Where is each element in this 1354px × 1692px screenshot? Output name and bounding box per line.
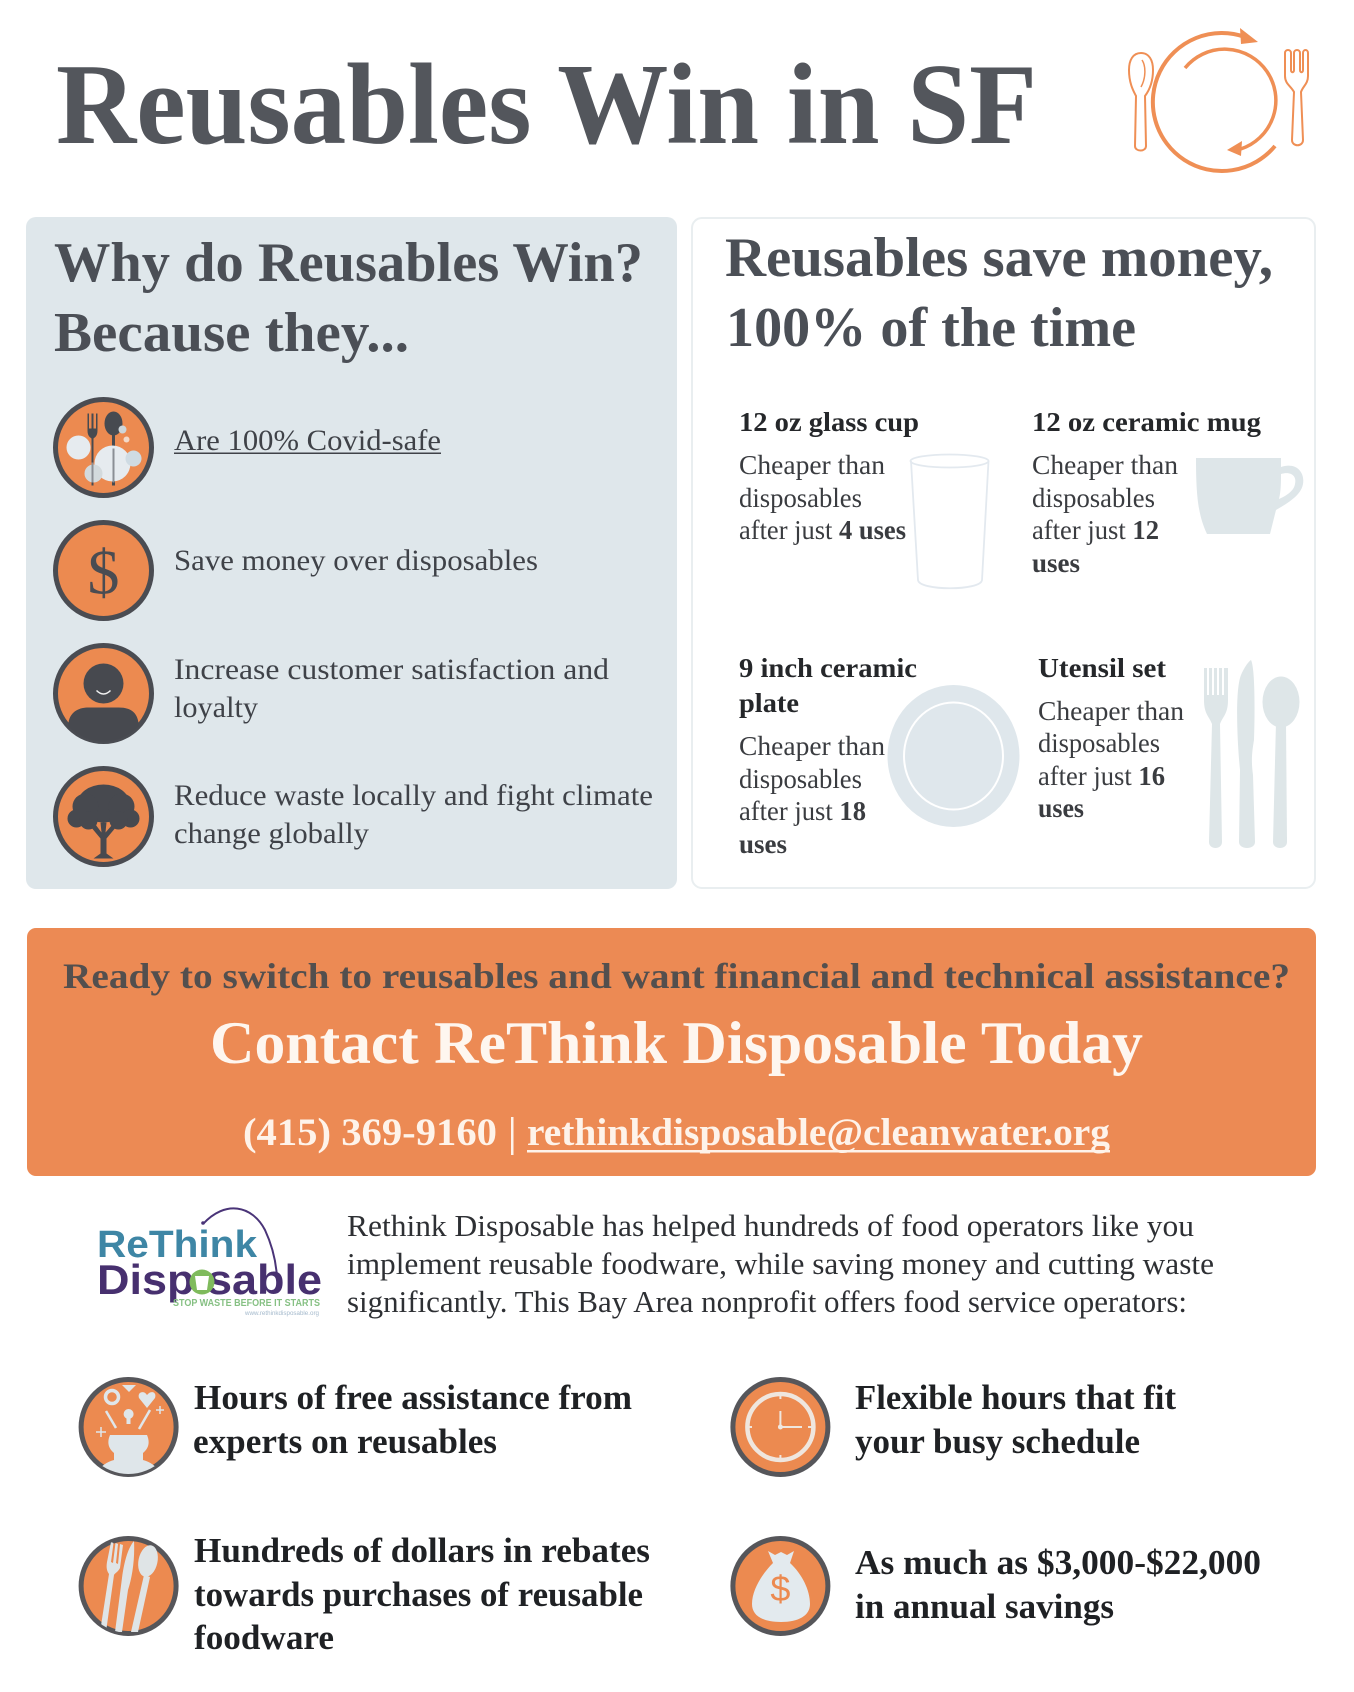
- item: utensil set: disposables: [1038, 728, 1160, 758]
- text: customer satisfaction: loyalty: [174, 691, 258, 724]
- item: ceramic plate: Cheaper than: [739, 731, 886, 761]
- text: annual savings: As much as $3,000-$22,000: [855, 1543, 1261, 1582]
- item: glass cup: 12 oz glass cup: [739, 407, 919, 437]
- item: utensil set: Cheaper than: [1038, 696, 1185, 726]
- heading: reusables save money: 100% of the time: [726, 297, 1136, 359]
- item: ceramic mug: disposables: [1032, 483, 1155, 513]
- item: utensil set: Utensil set: [1038, 653, 1166, 683]
- intro paragraph: Rethink Disposable has helped hundreds of food operators like you: [347, 1208, 1194, 1243]
- item: ceramic mug: after just 12: [1032, 515, 1159, 545]
- logo: ReThink Disposable: STOP WASTE BEFORE IT STARTS: [173, 1298, 320, 1309]
- icon: utensils: [81, 1538, 176, 1634]
- item: ceramic mug: [1032, 407, 1262, 578]
- text: free assistance: Hours of free assistance from: [194, 1378, 632, 1417]
- icon: dollar sign: [56, 522, 152, 618]
- item: utensil set: after just 16: [1038, 761, 1165, 791]
- heading: why do reusables win: Because they...: [54, 302, 409, 364]
- item: glass cup: after just 4 uses: [739, 515, 906, 545]
- heading: reusables save money: [725, 227, 1273, 359]
- icon: covid-safe utensils with bubbles: [56, 400, 152, 496]
- item: ceramic plate: after just 18: [739, 796, 866, 826]
- banner: contact call to action: [27, 928, 1316, 1176]
- icon: plate: [888, 685, 1020, 827]
- text: annual savings: in annual savings: [855, 1587, 1114, 1626]
- icon: money bag: $: [770, 1568, 790, 1609]
- icon: glass: [910, 454, 988, 588]
- text: free assistance: experts on reusables: [193, 1422, 497, 1461]
- item: ceramic plate: 9 inch ceramic: [739, 653, 917, 683]
- text: rebates: [194, 1531, 650, 1657]
- item: ceramic plate: disposables: [739, 764, 862, 794]
- intro paragraph: [347, 1208, 1214, 1319]
- icon: plate with circular arrows, spoon and fork: [1129, 28, 1308, 171]
- text: rebates: towards purchases of reusable: [194, 1575, 643, 1614]
- banner question: Ready to switch to reusables and want financial and technical assistance?: [63, 956, 1290, 996]
- heading: why do reusables win: [54, 232, 643, 364]
- text: flexible hours: [855, 1378, 1176, 1461]
- text: free assistance: [193, 1378, 632, 1461]
- item: ceramic mug: Cheaper than: [1032, 450, 1179, 480]
- icon: fork, knife and spoon: [1204, 660, 1300, 848]
- item: ceramic plate: uses: [739, 829, 787, 859]
- text: rebates: foodware: [194, 1618, 334, 1657]
- logo: ReThink Disposable: [97, 1208, 322, 1317]
- text: flexible hours: Flexible hours that fit: [855, 1378, 1176, 1417]
- logo: ReThink Disposable: www.rethinkdisposable.org: [244, 1310, 319, 1317]
- intro paragraph: significantly. This Bay Area nonprofit offers food service operators:: [347, 1284, 1187, 1319]
- banner contact details: (415) 369-9160: [243, 1111, 497, 1154]
- text: reduce waste: change globally: [174, 817, 369, 850]
- icon: expert head with ideas: [81, 1380, 176, 1476]
- icon: clock: [733, 1380, 828, 1474]
- text: reduce waste: [174, 779, 653, 850]
- item: utensil set: uses: [1038, 793, 1084, 823]
- icon: money bag: [733, 1538, 828, 1634]
- item: ceramic plate: plate: [739, 688, 799, 718]
- heading: reusables save money: Reusables save money,: [725, 227, 1273, 289]
- text: save money: Save money over disposables: [174, 544, 538, 577]
- banner contact details: [243, 1111, 1111, 1155]
- text: reduce waste: Reduce waste locally and fight climate: [174, 779, 653, 812]
- item: ceramic plate: [739, 653, 917, 859]
- banner contact details: rethinkdisposable@cleanwater.org: [527, 1111, 1111, 1154]
- panel: reusables save money: [692, 218, 1315, 888]
- logo: ReThink Disposable: Disp sable: [97, 1256, 322, 1303]
- icon: mug: [1196, 458, 1303, 534]
- intro paragraph: implement reusable foodware, while saving money and cutting waste: [347, 1246, 1214, 1281]
- item: glass cup: [739, 407, 919, 545]
- panel: why do reusables win: [26, 217, 677, 889]
- text: customer satisfaction: [174, 653, 609, 724]
- heading: why do reusables win: Why do Reusables Win?: [54, 232, 643, 294]
- text: annual savings: [855, 1543, 1261, 1626]
- item: utensil set: [1038, 653, 1185, 823]
- text: flexible hours: your busy schedule: [855, 1422, 1140, 1461]
- icon: smiling customer: [56, 646, 152, 746]
- item: glass cup: Cheaper than: [739, 450, 886, 480]
- text: are 100% covid-safe: Are 100% Covid-safe: [174, 424, 441, 457]
- text: rebates: Hundreds of dollars in rebates: [194, 1531, 650, 1570]
- icon: tree: [56, 768, 152, 864]
- title: Reusables Win in SF: [56, 41, 1037, 168]
- item: ceramic mug: 12 oz ceramic mug: [1032, 407, 1262, 437]
- logo: ReThink Disposable: ReThink: [97, 1224, 258, 1266]
- item: ceramic mug: uses: [1032, 548, 1080, 578]
- text: customer satisfaction: Increase customer satisfaction and: [174, 653, 609, 686]
- banner heading: Contact ReThink Disposable Today: [210, 1010, 1143, 1076]
- icon: dollar sign: $: [88, 536, 120, 608]
- item: glass cup: disposables: [739, 483, 862, 513]
